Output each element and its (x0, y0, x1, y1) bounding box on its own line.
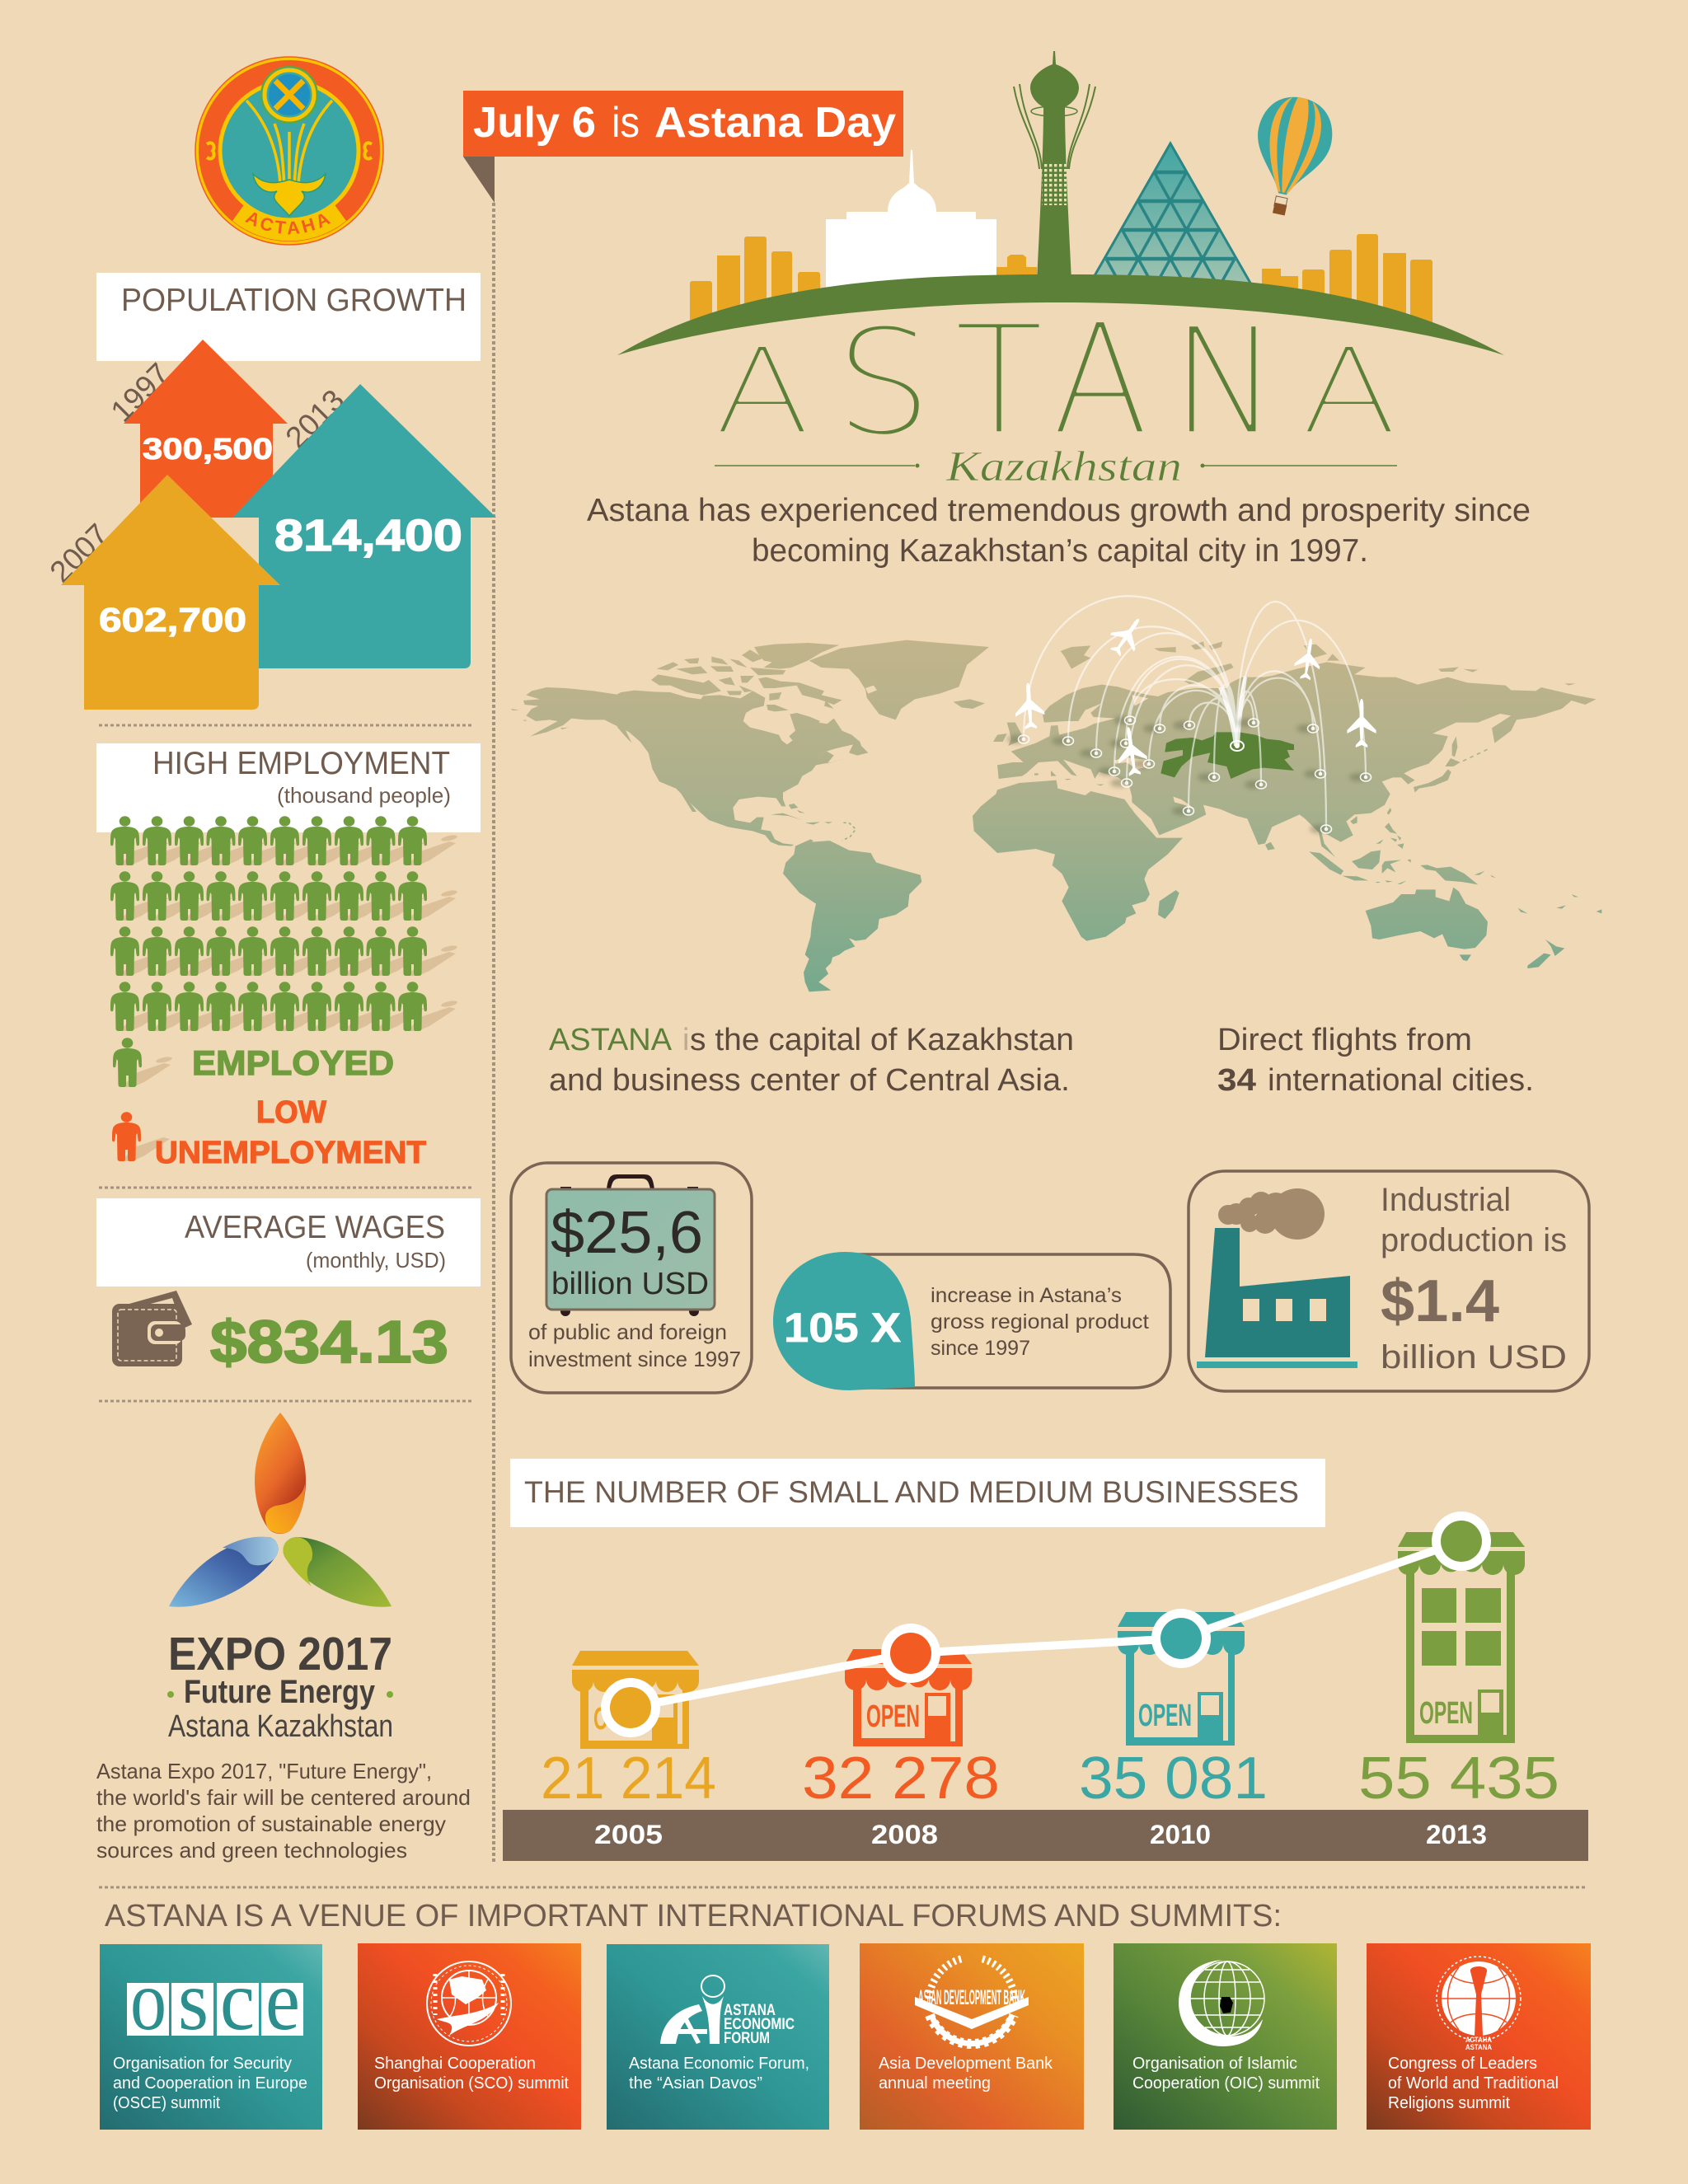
arrow 1997: 300,500 (143, 432, 273, 466)
card: OSCE (100, 1944, 322, 2130)
year axis bar: 2008 (871, 1820, 938, 1849)
expo description: the promotion of sustainable energy (96, 1811, 446, 1836)
logo: AEF (660, 1975, 795, 2047)
subtitle: Kazakhstan: Kazakhstan (945, 443, 1182, 490)
year labels: 1997 (105, 357, 176, 429)
legend: low unemployment: UNEMPLOYMENT (155, 1136, 426, 1170)
card: OSCE: and Cooperation in Europe (113, 2074, 307, 2093)
shop 2005 (572, 1651, 699, 1749)
text: capital of Kazakhstan: i (682, 1023, 689, 1057)
intro text: becoming Kazakhstan’s capital city in 1997. (752, 533, 1368, 569)
arrow 2007: 602,700 (99, 601, 246, 639)
logo: Congress (1437, 1957, 1521, 2051)
ribbon: astana day: is (612, 99, 640, 147)
logo: OSCE (127, 1953, 303, 2048)
expo 2017 logo: Future Energy (184, 1674, 376, 1710)
year axis bar (503, 1810, 1588, 1861)
card: OSCE: (OSCE) summit (113, 2094, 220, 2112)
year labels (44, 357, 351, 589)
values: 21 214 (541, 1746, 716, 1811)
expo description (96, 1759, 471, 1863)
card: Astana Economic Forum: Astana Economic Forum, (629, 2055, 809, 2073)
text: capital of Kazakhstan (549, 1023, 1074, 1098)
heading: average wages (96, 1198, 481, 1286)
panel: gross regional product: gross regional product (931, 1310, 1149, 1333)
airplanes (1013, 611, 1376, 777)
heading: population growth: POPULATION GROWTH (121, 283, 467, 318)
heading: forums and summits: ASTANA IS A VENUE OF IMPORTANT INTERNATIONAL FORUMS AND SUMMITS: (105, 1899, 1282, 1933)
text: direct flights: 34 (1217, 1063, 1256, 1098)
business chart (503, 1511, 1588, 1861)
inland seas (1114, 695, 1195, 810)
text: capital of Kazakhstan: ASTANA (549, 1023, 673, 1057)
year axis bar: 2013 (1426, 1820, 1487, 1849)
legend: employed (113, 1038, 394, 1087)
logo: AEF: ECONOMIC (724, 2016, 795, 2033)
expo description: the world's fair will be centered around (96, 1785, 471, 1810)
values: 35 081 (1079, 1746, 1268, 1811)
green hill (617, 274, 1504, 355)
logo: Congress: АСТАНА (1465, 2036, 1492, 2044)
card: Congress of Leaders (1367, 1943, 1591, 2130)
panel: industrial production: production is (1381, 1222, 1567, 1258)
title: ASTANA: T (954, 293, 1043, 469)
text: direct flights: Direct flights from (1217, 1023, 1472, 1057)
title: ASTANA (714, 290, 1398, 469)
logo: OSCE: c (220, 1953, 255, 2048)
card: OIC: Cooperation (OIC) summit (1132, 2074, 1320, 2093)
skyline illustration (617, 51, 1504, 355)
text: capital of Kazakhstan: and business center of Central Asia. (549, 1063, 1070, 1098)
panel: investment: of public and foreign (528, 1319, 727, 1344)
arrow 2013: 814,400 (274, 511, 462, 560)
panel: industrial production (1189, 1171, 1589, 1391)
card: OIC: Organisation of Islamic (1132, 2055, 1297, 2073)
legend: employed: EMPLOYED (192, 1043, 394, 1082)
pyramid (1086, 143, 1254, 290)
logo: AEF: ASTANA (724, 2002, 776, 2019)
icon: suitcase (546, 1174, 715, 1316)
shop 2005: OPEN (593, 1702, 647, 1736)
text: direct flights (1217, 1023, 1534, 1098)
white palace (826, 150, 996, 298)
expo 2017 logo: EXPO 2017 (168, 1628, 392, 1680)
legend: low unemployment (112, 1095, 426, 1170)
card: OIC (1114, 1943, 1337, 2130)
hot air balloon (1242, 91, 1339, 222)
intro text (587, 493, 1531, 569)
panel: investment: $25,6 (551, 1200, 703, 1266)
heading: small and medium businesses (510, 1459, 1325, 1527)
heading: high employment: HIGH EMPLOYMENT (152, 746, 450, 781)
icon: wallet (112, 1291, 192, 1366)
yellow buildings right (1262, 234, 1432, 332)
panel: gross regional product (773, 1252, 1170, 1390)
year axis bar: 2005 (594, 1820, 663, 1849)
year axis bar: 2010 (1150, 1820, 1211, 1849)
panel: investment: investment since 1997 (528, 1347, 741, 1371)
heading: high employment (96, 743, 481, 832)
legend: low unemployment: LOW (256, 1095, 326, 1130)
emblem of Astana (195, 56, 384, 246)
flight arcs (1024, 596, 1366, 829)
text: capital of Kazakhstan: s the capital of Kazakhstan (690, 1023, 1074, 1057)
converging flight paths (1218, 676, 1247, 746)
panel: gross regional product: since 1997 (931, 1337, 1030, 1360)
card: Asia Development Bank: Asia Development Bank (879, 2055, 1053, 2073)
panel: industrial production: $1.4 (1381, 1268, 1499, 1334)
heading: population growth (96, 273, 481, 361)
logo petals (169, 1413, 392, 1607)
text: direct flights: international cities. (1268, 1063, 1534, 1098)
card: Asia Development Bank: annual meeting (879, 2074, 991, 2093)
logo: OSCE: e (265, 1953, 300, 2048)
shop 2008: OPEN (866, 1699, 920, 1734)
card: Astana Economic Forum: the “Asian Davos” (629, 2074, 762, 2093)
yellow buildings centre (996, 255, 1037, 297)
Hudson and Great Lakes detail (795, 686, 877, 698)
logo: OIC (1179, 1960, 1264, 2046)
card: Asia Development Bank (860, 1943, 1084, 2130)
shop 2010 (1118, 1612, 1245, 1746)
values (541, 1746, 1559, 1811)
expo 2017 logo (167, 1413, 393, 1744)
population arrows chart (44, 340, 496, 710)
heading: average wages: (monthly, USD) (306, 1248, 446, 1272)
city markers (1007, 716, 1372, 833)
subtitle: Kazakhstan (715, 443, 1397, 490)
Europe, Africa and Asia (954, 641, 1597, 941)
logo: Congress: ASTANA (1465, 2043, 1492, 2051)
trend line (601, 1511, 1491, 1737)
card: Congress of Leaders: Congress of Leaders (1388, 2055, 1537, 2073)
panel: gross regional product: 105 X (784, 1305, 901, 1351)
panel: industrial production: Industrial (1381, 1182, 1511, 1218)
panel: industrial production: billion USD (1381, 1339, 1567, 1376)
card: SCO (358, 1943, 581, 2130)
arrow 2013 (232, 384, 496, 668)
world map (511, 596, 1601, 991)
shop 2010: OPEN (1138, 1699, 1192, 1733)
heading: high employment: (thousand people) (277, 783, 451, 808)
panel: investment: billion USD (551, 1267, 709, 1301)
card: Congress of Leaders: Religions summit (1388, 2094, 1510, 2112)
expo 2017 logo: Astana Kazakhstan (168, 1709, 393, 1744)
wages value: $834.13 (210, 1310, 448, 1376)
logo: OSCE: s (178, 1953, 209, 2048)
ribbon: astana day: Astana Day (654, 99, 896, 147)
ribbon: astana day: July 6 (473, 99, 596, 147)
title: ASTANA: A (714, 322, 811, 462)
Americas and Greenland (511, 640, 989, 991)
title: ASTANA: S (834, 298, 933, 468)
ribbon: astana day (463, 91, 903, 203)
card: OSCE: Organisation for Security (113, 2055, 292, 2073)
values: 55 435 (1358, 1746, 1559, 1811)
card: Asia Development Bank: ASIAN DEVELOPMENT BANK (918, 1986, 1025, 2009)
heading: average wages: AVERAGE WAGES (185, 1210, 445, 1245)
card: SCO: Organisation (SCO) summit (374, 2074, 569, 2093)
shop 2013 (1398, 1532, 1525, 1743)
values: 32 278 (802, 1746, 1000, 1811)
emblem of Astana: АСТАНА (245, 213, 331, 234)
expo description: Astana Expo 2017, "Future Energy", (96, 1759, 432, 1783)
icon: factory (1197, 1188, 1357, 1368)
title: ASTANA: A (1301, 322, 1398, 462)
logo: SCO (427, 1961, 511, 2046)
year labels: 2013 (279, 383, 351, 455)
panel: investment (511, 1163, 752, 1393)
arrow 1997 (124, 340, 288, 518)
logo: OSCE: o (130, 1953, 166, 2048)
people pictogram grid (110, 816, 457, 1031)
intro text: Astana has experienced tremendous growth and prosperity since (587, 493, 1531, 528)
panel: gross regional product: increase in Astana’s (931, 1284, 1122, 1307)
yellow buildings left (690, 237, 820, 332)
logo: AEF: FORUM (724, 2030, 770, 2047)
logo: ADB (915, 1958, 1029, 2044)
year labels: 2007 (44, 518, 115, 589)
bayterek tower (1014, 51, 1095, 280)
shop 2013: OPEN (1419, 1696, 1473, 1731)
card: SCO: Shanghai Cooperation (374, 2055, 536, 2073)
Asia-Pacific islands (1304, 644, 1601, 968)
card: Astana Economic Forum (607, 1944, 829, 2130)
arrow 2007 (61, 475, 280, 710)
card: Congress of Leaders: of World and Traditional (1388, 2074, 1559, 2093)
title: ASTANA: N (1170, 297, 1279, 468)
expo description: sources and green technologies (96, 1838, 407, 1863)
vertical column divider (492, 203, 495, 1864)
shop 2008 (845, 1649, 972, 1746)
title: ASTANA: A (1052, 290, 1149, 469)
Kazakhstan highlight (1160, 732, 1294, 779)
Astana marker (1231, 741, 1244, 751)
heading: small and medium businesses: THE NUMBER OF SMALL AND MEDIUM BUSINESSES (524, 1475, 1299, 1509)
